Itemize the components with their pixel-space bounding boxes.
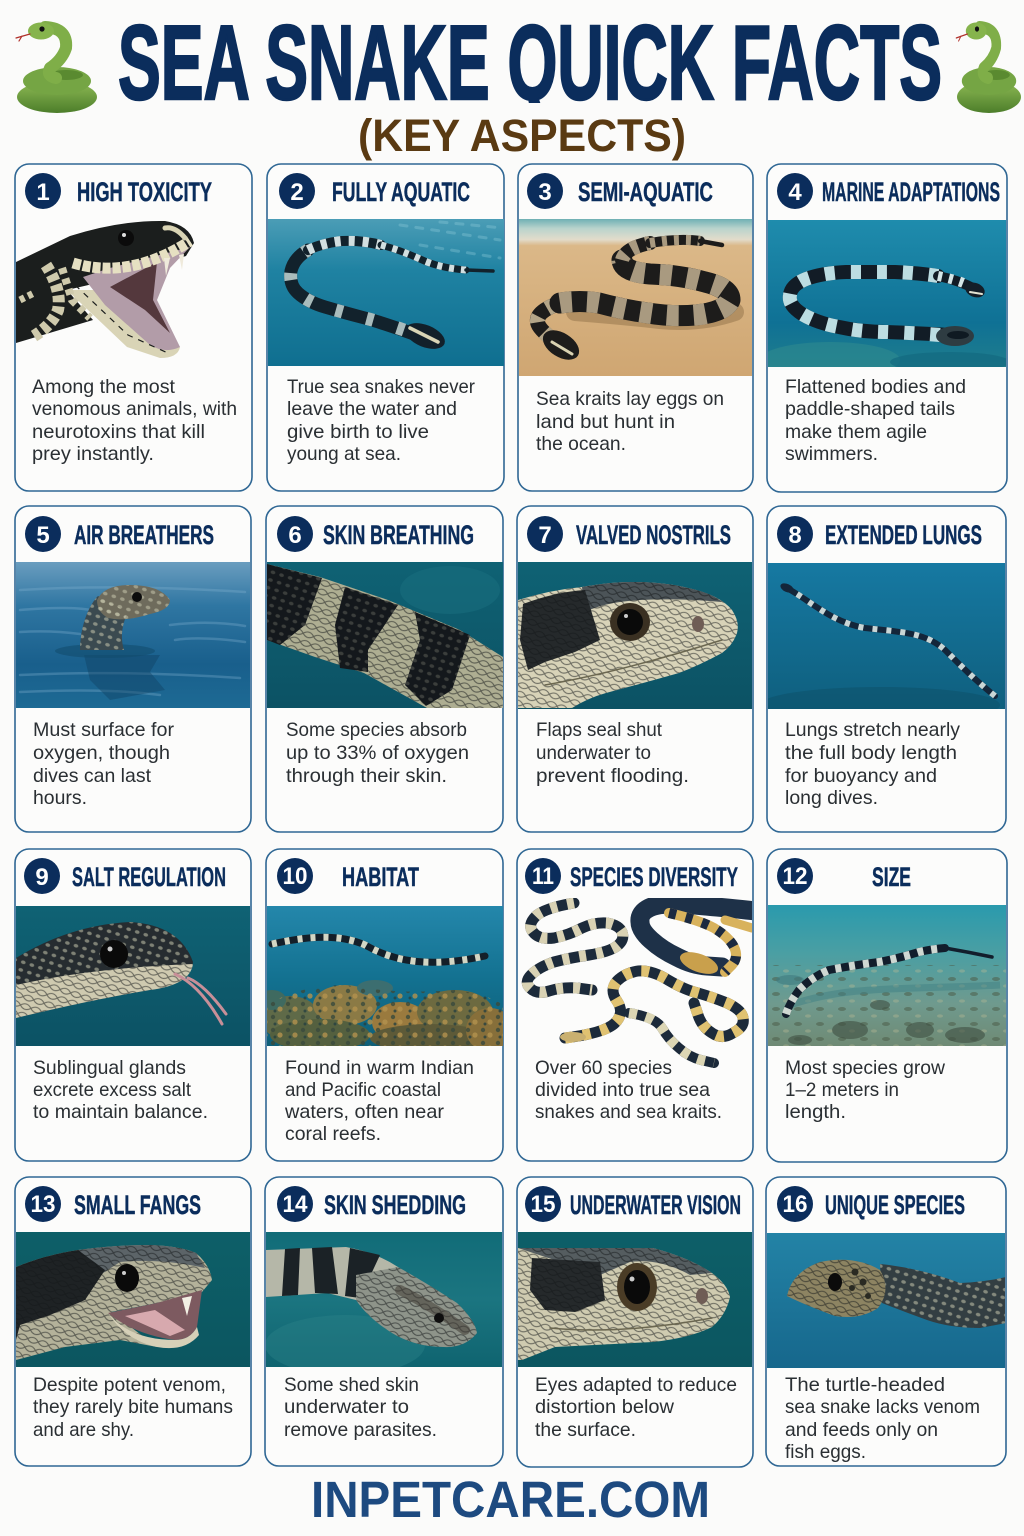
heading: semi-aquatic: SEMI-AQUATIC xyxy=(578,177,713,207)
text: small fangs xyxy=(33,1374,233,1441)
panel: 7 valved nostrils xyxy=(517,506,753,832)
icon: snake emoji left xyxy=(16,22,97,113)
badge 9: 9 xyxy=(35,864,49,891)
badge 15: 15 xyxy=(530,1191,556,1218)
text: salt regulation: to maintain balance. xyxy=(33,1101,208,1123)
image: snake above the seabed xyxy=(768,905,1006,1046)
badge 13: 13 xyxy=(30,1191,56,1218)
text: underwater vision xyxy=(535,1374,737,1441)
text: size: 1–2 meters in xyxy=(785,1079,899,1101)
text: air breathers: oxygen, though xyxy=(33,742,170,764)
image: eye close-up xyxy=(518,1232,752,1367)
badge 8: 8 xyxy=(788,522,802,549)
heading: species diversity: SPECIES DIVERSITY xyxy=(570,862,738,892)
badge 14: 14 xyxy=(282,1191,308,1218)
text: high toxicity: Among the most xyxy=(32,376,176,398)
image: snake with open mouth xyxy=(16,221,194,358)
text: semi-aquatic: Sea kraits lay eggs on xyxy=(536,388,724,410)
text: marine adaptations: make them agile xyxy=(785,421,927,443)
text: species diversity: divided into true sea xyxy=(535,1079,710,1101)
heading: skin breathing: SKIN BREATHING xyxy=(323,520,474,550)
text: skin breathing xyxy=(286,719,469,787)
text: size: length. xyxy=(785,1101,846,1123)
badge 1: 1 xyxy=(36,179,50,206)
text: size: Most species grow xyxy=(785,1057,946,1079)
heading: habitat: HABITAT xyxy=(342,862,419,892)
badge 11: 11 xyxy=(532,863,554,890)
text: salt regulation xyxy=(33,1057,208,1123)
image: turtle-headed sea snake xyxy=(767,1233,1005,1368)
image: snake above coral reef xyxy=(267,906,503,1046)
badge 13 xyxy=(25,1186,61,1222)
badge 3 xyxy=(527,173,563,209)
badge 4: 4 xyxy=(788,179,802,206)
text: skin breathing: through their skin. xyxy=(286,765,447,787)
text: salt regulation: Sublingual glands xyxy=(33,1057,186,1079)
badge 16: 16 xyxy=(782,1191,808,1218)
text: fully aquatic: young at sea. xyxy=(287,443,401,465)
panel: 9 salt regulation xyxy=(15,849,251,1161)
image: long thin snake xyxy=(768,563,1005,709)
text: size xyxy=(785,1057,946,1123)
image: snake head at the surface xyxy=(16,562,250,708)
heading: skin shedding: SKIN SHEDDING xyxy=(324,1190,466,1220)
badge 12 xyxy=(777,858,813,894)
text: species diversity xyxy=(535,1057,722,1123)
text: marine adaptations: paddle-shaped tails xyxy=(785,398,955,420)
text: marine adaptations: Flattened bodies and xyxy=(785,376,966,398)
text: air breathers: hours. xyxy=(33,787,87,809)
panel: 13 small fangs xyxy=(15,1177,251,1466)
text: valved nostrils xyxy=(536,719,689,787)
badge 4 xyxy=(777,173,813,209)
image: head close-up with nostril xyxy=(518,562,752,709)
text: high toxicity xyxy=(32,376,237,465)
footer: website: INPETCARE.COM xyxy=(311,1471,710,1528)
text: skin shedding: underwater to xyxy=(284,1396,409,1418)
text: habitat: and Pacific coastal xyxy=(285,1079,441,1101)
text: fully aquatic xyxy=(287,376,475,465)
text: fully aquatic: True sea snakes never xyxy=(287,376,475,398)
badge 6 xyxy=(277,516,313,552)
text: extended lungs xyxy=(785,719,960,809)
badge 2 xyxy=(279,173,315,209)
badge 15 xyxy=(525,1186,561,1222)
image: swimming snake xyxy=(268,219,504,366)
heading: salt regulation: SALT REGULATION xyxy=(72,862,226,892)
subtitle: (KEY ASPECTS) xyxy=(358,110,686,161)
text: high toxicity: venomous animals, with xyxy=(32,398,237,420)
text: valved nostrils: prevent flooding. xyxy=(536,765,689,787)
text: extended lungs: for buoyancy and xyxy=(785,765,937,787)
panel: 12 size xyxy=(767,849,1007,1162)
panel: 6 skin breathing xyxy=(266,506,503,832)
badge 6: 6 xyxy=(288,522,302,549)
text: valved nostrils: Flaps seal shut xyxy=(536,719,663,741)
text: unique species: sea snake lacks venom xyxy=(785,1396,980,1418)
text: underwater vision: the surface. xyxy=(535,1419,636,1441)
text: air breathers: Must surface for xyxy=(33,719,175,741)
badge 8 xyxy=(777,516,813,552)
badge 5: 5 xyxy=(36,522,50,549)
text: extended lungs: Lungs stretch nearly xyxy=(785,719,960,741)
heading: underwater vision: UNDERWATER VISION xyxy=(570,1190,741,1220)
heading: fully aquatic: FULLY AQUATIC xyxy=(332,177,470,207)
text: air breathers: dives can last xyxy=(33,765,152,787)
image: head with tongue xyxy=(16,906,250,1046)
text: skin shedding: Some shed skin xyxy=(284,1374,419,1396)
panel: 8 extended lungs xyxy=(760,506,1006,832)
heading: size: SIZE xyxy=(872,862,911,892)
badge 7 xyxy=(527,516,563,552)
text: semi-aquatic xyxy=(536,388,724,455)
text: habitat: coral reefs. xyxy=(285,1123,381,1145)
heading: high toxicity: HIGH TOXICITY xyxy=(77,177,212,207)
text: underwater vision: Eyes adapted to reduce xyxy=(535,1374,737,1396)
text: unique species: fish eggs. xyxy=(785,1441,866,1463)
text: valved nostrils: underwater to xyxy=(536,742,651,764)
text: semi-aquatic: land but hunt in xyxy=(536,411,675,433)
text: small fangs: and are shy. xyxy=(33,1419,134,1441)
panel: 14 skin shedding xyxy=(265,1177,503,1466)
text: habitat xyxy=(284,1057,474,1145)
badge 14 xyxy=(277,1186,313,1222)
text: fully aquatic: leave the water and xyxy=(287,398,457,420)
image: close-up of skin scales xyxy=(267,562,503,708)
badge 7: 7 xyxy=(538,522,552,549)
badge 5 xyxy=(25,516,61,552)
heading: valved nostrils: VALVED NOSTRILS xyxy=(576,520,731,550)
badge 10 xyxy=(277,858,313,894)
badge 9 xyxy=(24,858,60,894)
text: skin shedding xyxy=(284,1374,437,1441)
badge 11 xyxy=(525,858,561,894)
image: head with small fangs xyxy=(16,1232,250,1367)
panel: 1 high toxicity xyxy=(15,164,252,491)
text: habitat: Found in warm Indian xyxy=(285,1057,474,1079)
badge 1 xyxy=(25,173,61,209)
text: skin breathing: up to 33% of oxygen xyxy=(286,742,469,764)
badge 2: 2 xyxy=(290,179,304,206)
panel: 5 air breathers xyxy=(15,506,251,832)
text: unique species: The turtle-headed xyxy=(785,1374,945,1396)
text: marine adaptations xyxy=(785,376,966,465)
text: underwater vision: distortion below xyxy=(535,1396,675,1418)
text: small fangs: Despite potent venom, xyxy=(33,1374,226,1396)
panel: 2 fully aquatic xyxy=(267,164,504,491)
heading: air breathers: AIR BREATHERS xyxy=(74,520,214,550)
panel: 15 underwater vision xyxy=(517,1177,753,1467)
text: species diversity: snakes and sea kraits. xyxy=(535,1101,722,1123)
text: extended lungs: long dives. xyxy=(785,787,878,809)
text: semi-aquatic: the ocean. xyxy=(536,433,626,455)
text: unique species xyxy=(785,1374,980,1463)
badge 3: 3 xyxy=(538,179,552,206)
panel: 10 habitat xyxy=(258,849,514,1161)
image: group of snakes xyxy=(522,898,752,1068)
text: small fangs: they rarely bite humans xyxy=(33,1396,233,1418)
heading: small fangs: SMALL FANGS xyxy=(74,1190,201,1220)
text: salt regulation: excrete excess salt xyxy=(33,1079,192,1101)
panel: 11 species diversity xyxy=(517,849,756,1161)
badge 16 xyxy=(777,1186,813,1222)
panel: 4 marine adaptations xyxy=(760,164,1010,492)
badge 10: 10 xyxy=(282,863,308,890)
panel: 16 unique species xyxy=(766,1177,1006,1466)
text: high toxicity: prey instantly. xyxy=(32,443,154,465)
text: habitat: waters, often near xyxy=(284,1101,445,1123)
text: high toxicity: neurotoxins that kill xyxy=(32,421,205,443)
text: extended lungs: the full body length xyxy=(785,742,957,764)
badge 12: 12 xyxy=(782,863,808,890)
panel: 3 semi-aquatic xyxy=(518,164,753,491)
icon: snake emoji right xyxy=(956,22,1021,113)
text: marine adaptations: swimmers. xyxy=(785,443,878,465)
image: snake on sand xyxy=(519,219,752,376)
image: snake shedding skin xyxy=(266,1232,502,1367)
text: species diversity: Over 60 species xyxy=(535,1057,672,1079)
text: fully aquatic: give birth to live xyxy=(287,421,429,443)
text: skin shedding: remove parasites. xyxy=(284,1419,437,1441)
image: flattened swimming snake xyxy=(768,220,1006,367)
text: skin breathing: Some species absorb xyxy=(286,719,467,741)
text: unique species: and feeds only on xyxy=(785,1419,938,1441)
text: air breathers xyxy=(33,719,175,809)
